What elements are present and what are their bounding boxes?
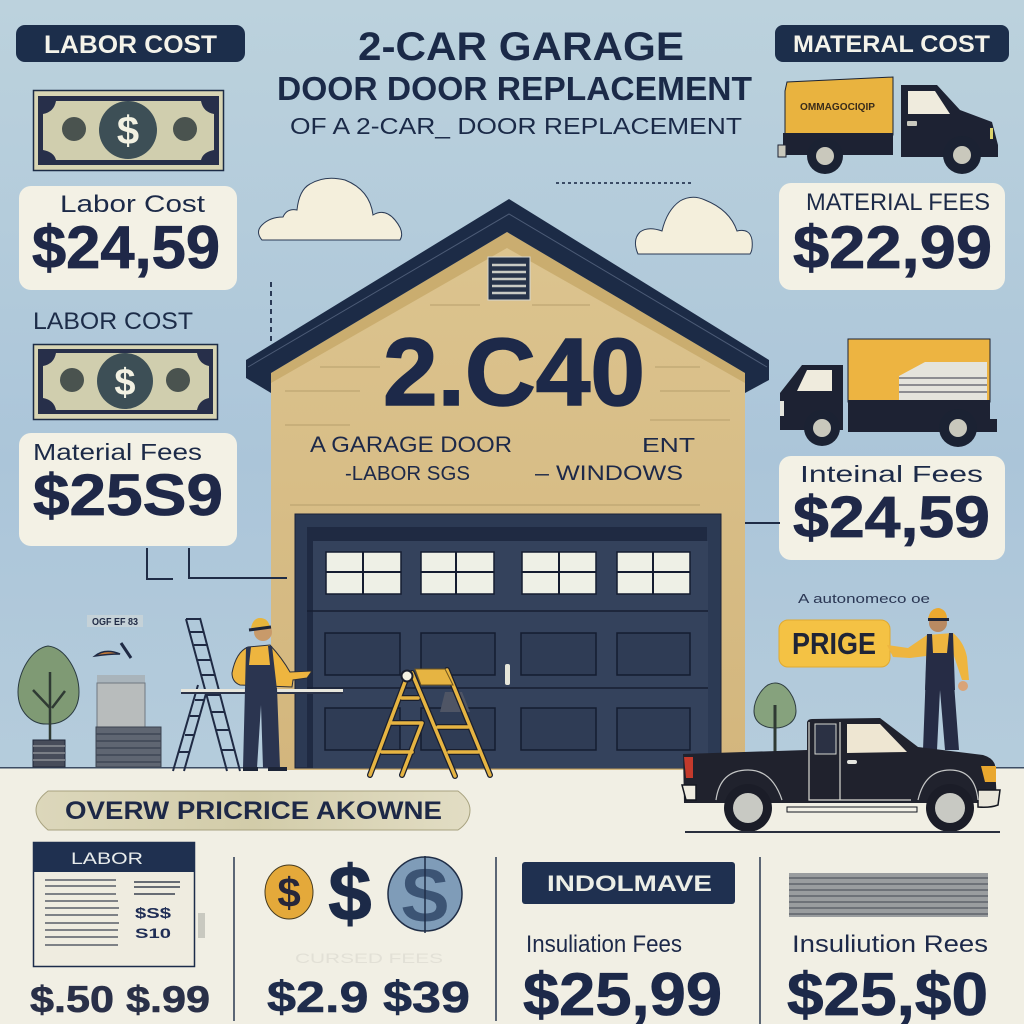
label: material cost	[775, 25, 1009, 62]
tree left	[18, 646, 79, 767]
card: material fees price right: $22,99	[793, 214, 992, 281]
label: indolmave: INDOLMAVE	[547, 871, 712, 896]
building caption	[310, 432, 695, 485]
garage building	[246, 199, 769, 770]
icon: garage shutter	[789, 873, 988, 917]
icon: dollar bill 1: $	[117, 109, 139, 153]
faint small note right: A autonomeco oe	[798, 591, 930, 606]
icons: dollar coins	[265, 849, 462, 937]
building number: 2.C40	[383, 319, 645, 426]
label: labor cost 2: LABOR COST	[33, 308, 193, 335]
wall and gable	[271, 232, 745, 770]
worker right	[887, 608, 969, 750]
icon: box truck 2	[780, 339, 997, 447]
connector lines	[147, 523, 780, 579]
gable vent	[488, 257, 530, 300]
icon: box truck 1: OMMAGOCIQIP	[800, 102, 875, 113]
card: internal fees price: Inteinal Fees	[800, 461, 983, 487]
sign: price	[779, 620, 890, 667]
insulation rees price	[787, 931, 988, 1024]
title	[277, 25, 752, 139]
card: internal fees price	[779, 456, 1005, 560]
label: labor cost	[16, 25, 245, 62]
title: 2-CAR GARAGE	[358, 25, 684, 69]
banner: overview	[36, 791, 470, 830]
faint caption: CURSED FEES	[295, 950, 443, 966]
siding lines	[285, 305, 730, 505]
cloud left	[258, 178, 402, 240]
labor document card	[33, 842, 205, 966]
worker	[232, 618, 312, 771]
icons: dollar coins: S	[400, 854, 450, 937]
icon: dollar bill 1	[34, 90, 224, 170]
yellow step ladder	[370, 669, 490, 776]
roof	[246, 199, 769, 393]
labor document card: LABOR	[71, 849, 143, 868]
icons: dollar coins: $	[277, 869, 301, 916]
card: material fees price left: Material Fees	[33, 439, 202, 465]
card: material fees price left: $25S9	[33, 463, 223, 528]
icon: dollar bill 2	[34, 344, 218, 420]
building caption: A GARAGE DOOR	[310, 432, 512, 457]
sign: price: PRIGE	[792, 626, 876, 661]
worker left with ladder and table	[173, 618, 343, 771]
banner: overview: OVERW PRICRICE AKOWNE	[65, 797, 442, 825]
price: coins summary: $2.9 $39	[267, 973, 470, 1022]
building caption: ENT	[642, 435, 695, 457]
card: material fees price left	[19, 433, 237, 546]
title: DOOR DOOR REPLACEMENT	[277, 70, 752, 107]
faint annotation label: OGF EF 83	[92, 617, 138, 628]
building caption: – WINDOWS	[535, 462, 683, 485]
insulation fees price: Insuliation Fees	[526, 931, 682, 958]
grey ladder	[173, 618, 240, 771]
price: labor summary: $.50 $.99	[30, 979, 210, 1020]
pickup truck	[682, 718, 1000, 833]
icons: dollar coins: $	[328, 849, 372, 937]
cloud right	[635, 197, 752, 254]
card: material fees price right	[779, 183, 1005, 290]
dashed annotation lines	[271, 183, 724, 342]
label: indolmave	[522, 862, 735, 904]
label: labor cost: LABOR COST	[44, 31, 217, 59]
garage door	[295, 514, 721, 768]
card: labor cost price: Labor Cost	[60, 191, 205, 218]
card: material fees price right: MATERIAL FEES	[806, 189, 990, 216]
work table	[181, 689, 343, 694]
labor document card: S10	[135, 925, 171, 941]
tree right	[754, 683, 796, 752]
labor document card: $S$	[135, 905, 172, 922]
icon: dollar bill 2: $	[114, 362, 136, 404]
icon: small tools	[95, 643, 131, 658]
insulation rees price: Insuliution Rees	[792, 931, 988, 958]
shaded gable band	[271, 232, 745, 383]
icon: box truck 1	[778, 77, 998, 174]
card: internal fees price: $24,59	[793, 485, 990, 550]
stacked garage panels	[96, 675, 161, 767]
building caption: -LABOR SGS	[345, 463, 470, 485]
card: labor cost price: $24,59	[32, 214, 220, 281]
title: OF A 2-CAR_ DOOR REPLACEMENT	[290, 113, 742, 139]
card: labor cost price	[19, 186, 237, 290]
insulation fees price	[523, 931, 722, 1024]
label: material cost: MATERAL COST	[793, 31, 990, 58]
dividers	[234, 857, 760, 1024]
